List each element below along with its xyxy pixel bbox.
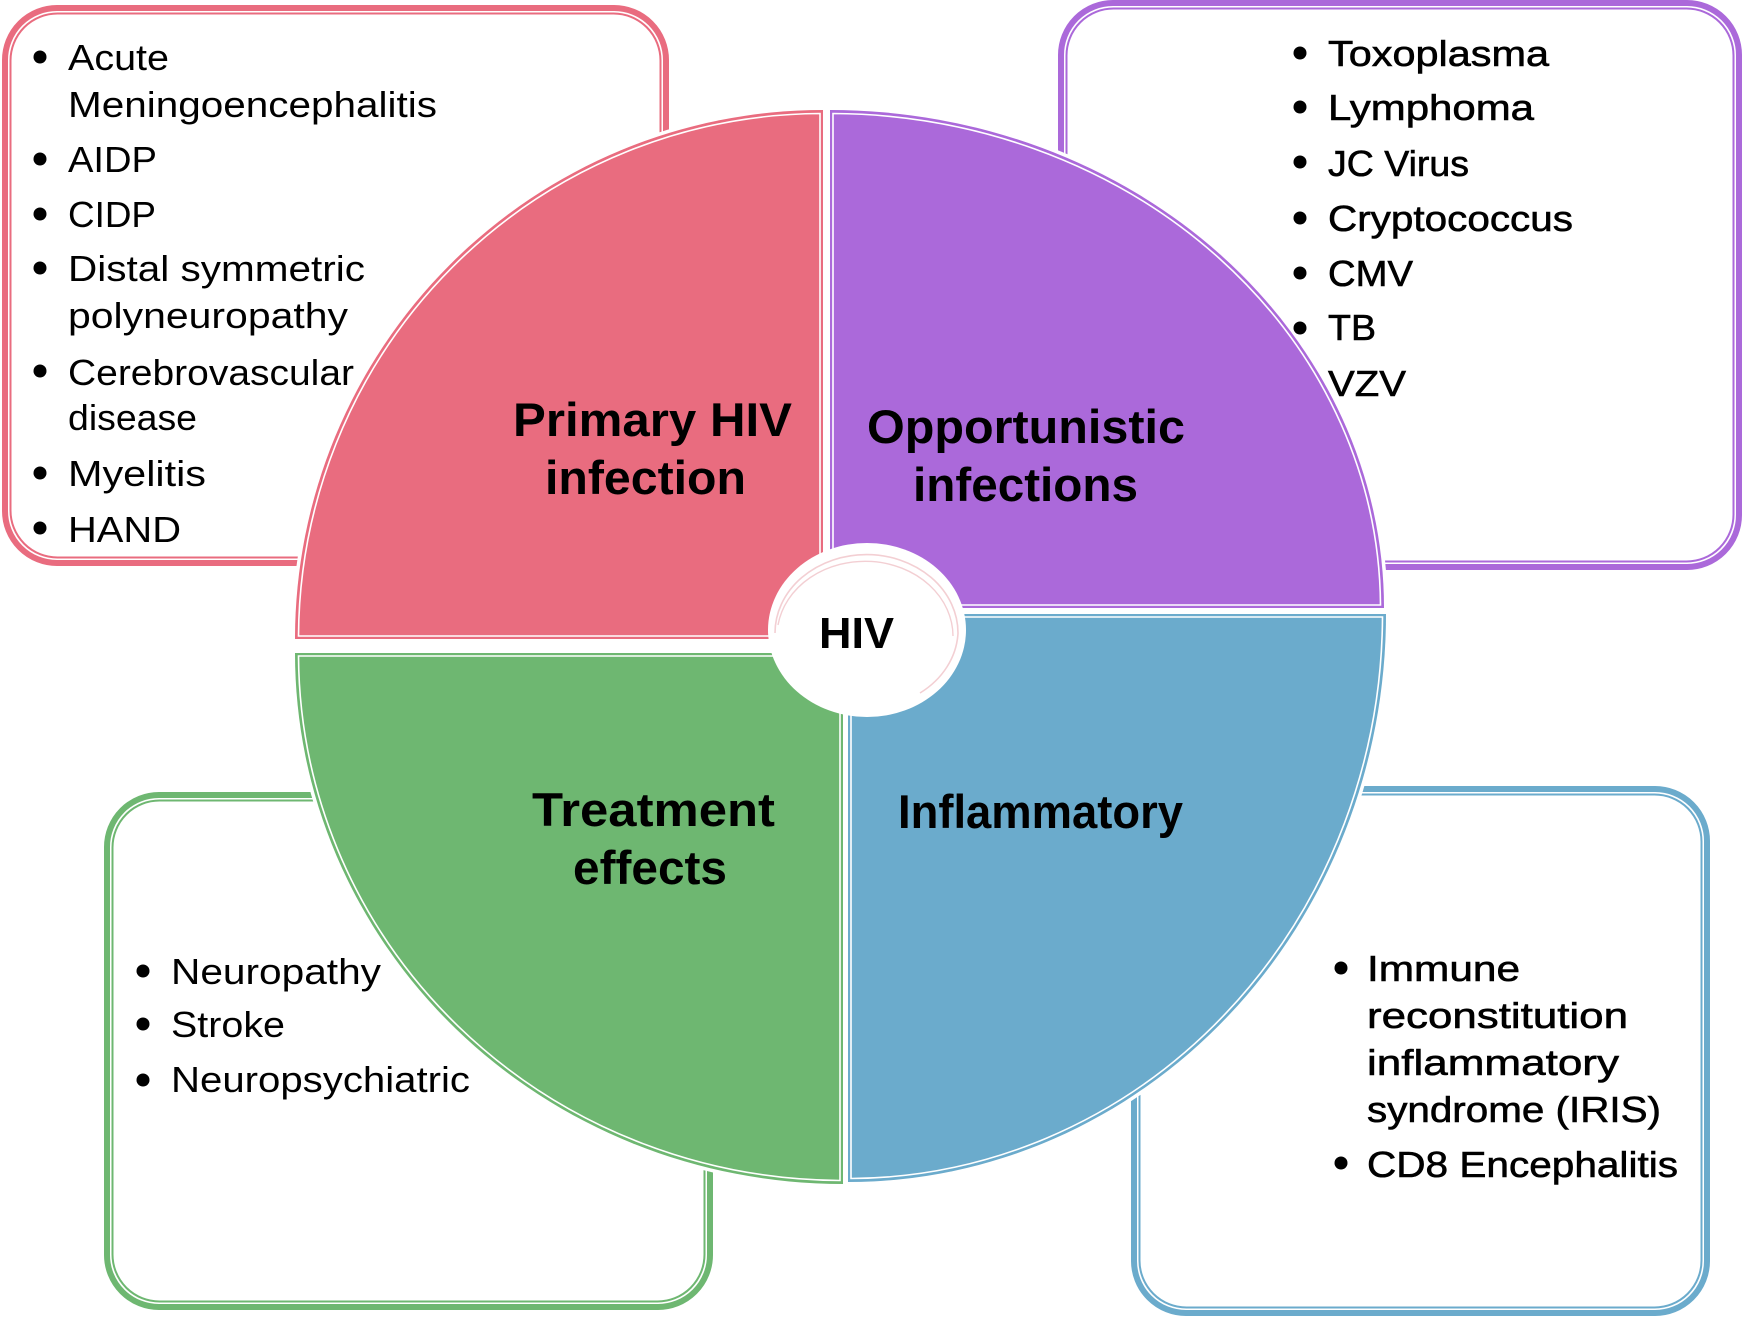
list: inflammatory conditions: reconstitution [1367,995,1628,1036]
list: primary HIV infection conditions: Myelitis [68,453,206,494]
heading: Primary HIV infection [513,393,793,504]
list: primary HIV infection conditions: AIDP [68,139,157,180]
sector: opportunistic infections [830,110,1384,608]
heading: Primary HIV infection: infection [545,451,746,504]
list: inflammatory conditions: CD8 Encephalitis [1367,1144,1678,1185]
panel: primary HIV infection conditions box [5,8,666,563]
heading: Primary HIV infection: Primary HIV [513,393,793,446]
heading: Inflammatory: Inflammatory [898,785,1183,838]
list: opportunistic infections conditions: Cryptococcus [1328,198,1573,239]
list: primary HIV infection conditions: Cerebrovascular [68,352,354,393]
list: opportunistic infections conditions: TB [1328,307,1376,348]
list: primary HIV infection conditions: CIDP [68,194,156,235]
list: inflammatory conditions: inflammatory [1367,1042,1619,1083]
list: primary HIV infection conditions: Distal symmetric [68,248,365,289]
list: inflammatory conditions [1334,948,1678,1185]
list: primary HIV infection conditions: Acute [68,37,169,78]
center circle: HIV [768,543,966,717]
sector: primary HIV infection [295,110,823,639]
list: inflammatory conditions: Immune [1367,948,1520,989]
list: opportunistic infections conditions: JC Virus [1328,143,1469,184]
heading: Opportunistic infections [867,400,1185,511]
sector: inflammatory [848,614,1386,1182]
list: opportunistic infections conditions: Lymphoma [1328,87,1535,128]
sector: treatment effects [295,653,843,1184]
heading: Treatment effects: effects [573,841,727,894]
list: treatment effects conditions: Neuropsychiatric [171,1059,470,1100]
list: opportunistic infections conditions: VZV [1328,363,1406,404]
panel: treatment effects conditions box [107,795,710,1307]
center circle: HIV: HIV [819,609,895,658]
list: treatment effects conditions: Stroke [171,1004,285,1045]
list: primary HIV infection conditions: polyneuropathy [68,295,348,336]
list: treatment effects conditions [136,951,470,1100]
heading: Treatment effects [532,783,775,894]
list: inflammatory conditions: syndrome (IRIS) [1367,1089,1661,1130]
heading: Treatment effects: Treatment [532,783,775,836]
heading: Opportunistic infections: infections [913,458,1138,511]
list: primary HIV infection conditions: Meningoencephalitis [68,84,437,125]
list: opportunistic infections conditions [1294,33,1573,404]
list: opportunistic infections conditions: Toxoplasma [1328,33,1550,74]
list: primary HIV infection conditions [34,37,437,550]
list: opportunistic infections conditions: CMV [1328,253,1413,294]
list: primary HIV infection conditions: disease [68,397,197,438]
heading: Opportunistic infections: Opportunistic [867,400,1185,453]
panel: inflammatory conditions box [1134,789,1707,1313]
panel: opportunistic infections conditions box [1061,3,1739,567]
list: treatment effects conditions: Neuropathy [171,951,381,992]
list: primary HIV infection conditions: HAND [68,509,181,550]
